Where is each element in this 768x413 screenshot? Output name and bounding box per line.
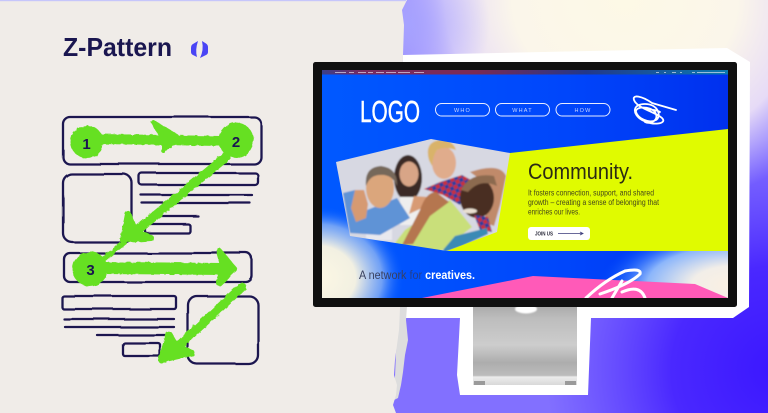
monitor stand	[473, 304, 577, 385]
circle 2	[218, 122, 254, 158]
wireframe band box	[64, 253, 252, 282]
body text: It fosters connection, support, and shared	[528, 188, 654, 198]
blond man	[424, 140, 471, 205]
tagline: A network for creatives.	[359, 270, 475, 282]
arrow 1 to 2	[100, 123, 220, 151]
wireframe button bottom	[123, 343, 160, 356]
number 1: 1	[82, 136, 91, 153]
wireframe page layout	[62, 117, 261, 364]
photo of four friends	[336, 139, 510, 251]
torn paper panel	[0, 0, 408, 413]
circle 3	[72, 252, 108, 286]
nav button: how: HOW	[574, 108, 592, 114]
wireframe heading box top	[139, 173, 258, 185]
nav button: what: WHAT	[512, 108, 533, 114]
number 2: 2	[232, 134, 240, 151]
woman with dark hair	[394, 155, 422, 225]
wireframe image box top	[63, 174, 132, 242]
green Z path arrows	[70, 122, 254, 360]
diagonal arrow to end	[161, 287, 242, 360]
join us button	[528, 227, 590, 240]
scribble	[634, 96, 676, 124]
monitor screen: website	[322, 70, 728, 298]
body text: enriches our lives.	[528, 208, 580, 216]
wireframe heading box bottom	[62, 296, 176, 309]
body text: growth – creating a sense of belonging that	[528, 198, 660, 207]
icon: brand hexagon logo	[191, 41, 208, 58]
nav button: what	[496, 104, 550, 116]
arrow 3 right	[105, 251, 234, 283]
wireframe header box	[63, 117, 261, 164]
wireframe text lines top	[141, 195, 252, 216]
man in blue sweater	[343, 166, 428, 240]
nav button: how	[556, 104, 610, 116]
wireframe button top	[145, 224, 190, 233]
wireframe text lines bottom	[64, 319, 174, 335]
diagonal arrow 2 to 3	[100, 157, 226, 262]
wireframe image box bottom	[188, 296, 258, 364]
yellow panel	[447, 129, 728, 251]
join us button: JOIN US	[535, 232, 554, 238]
white scribble on pink	[586, 270, 645, 298]
nav button: who: WHO	[454, 108, 471, 114]
background: purple and cream gradient	[380, 0, 768, 413]
monitor frame	[313, 62, 737, 307]
nav button: who	[436, 104, 490, 116]
title: Z-Pattern	[63, 32, 172, 62]
menu bar	[322, 70, 728, 74]
circle 1	[70, 126, 104, 158]
screen background	[322, 70, 728, 298]
woman in lime top	[395, 168, 506, 252]
pink shape	[422, 276, 728, 298]
body text	[528, 190, 659, 214]
white sticker outline behind monitor	[403, 48, 750, 395]
heading: community: Community.	[528, 159, 633, 184]
logo text: LOGO	[360, 94, 420, 129]
number 3: 3	[86, 262, 95, 279]
